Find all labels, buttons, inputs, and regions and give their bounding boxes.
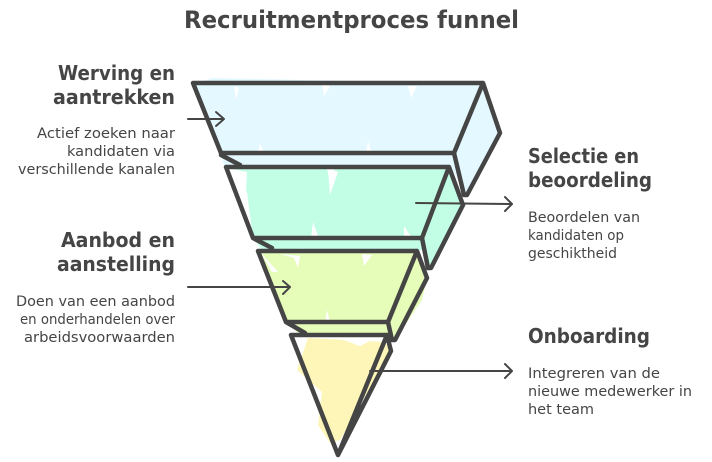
text: Werving en aantrekken description: kandidaten via [67,144,175,160]
funnel [193,78,500,455]
heading: Werving en aantrekken: Werving en [58,61,175,85]
text: Werving en aantrekken description: verschillende kanalen [18,162,175,178]
funnel layer: Selectie en beoordeling [226,167,463,268]
text: Aanbod en aanstelling description [16,294,175,346]
heading: Selectie en beoordeling: Selectie en [528,144,639,168]
arrow: Onboarding [370,364,512,378]
text: Selectie en beoordeling description: kandidaten op [528,228,624,244]
funnel layer: Aanbod en aanstelling [258,251,427,340]
text: Onboarding description [528,366,692,418]
heading: Aanbod en aanstelling [57,228,175,276]
text: Aanbod en aanstelling description: en onderhandelen over [20,312,175,328]
text: Onboarding description: Integreren van de [528,366,660,382]
heading: Aanbod en aanstelling: Aanbod en [61,228,175,252]
text: Onboarding description: het team [528,402,594,418]
text: Selectie en beoordeling description: geschiktheid [528,246,617,262]
arrow: Werving en aantrekken [188,112,224,126]
text: Selectie en beoordeling description [528,210,640,262]
text: Aanbod en aanstelling description: arbeidsvoorwaarden [24,330,175,346]
text: Werving en aantrekken description [18,126,175,178]
text: Aanbod en aanstelling description: Doen van een aanbod [16,294,175,310]
heading: Onboarding: Onboarding [528,324,650,348]
text: Selectie en beoordeling description: Beoordelen van [528,210,640,226]
heading: Werving en aantrekken [53,61,175,109]
funnel layer: Onboarding [291,335,391,455]
heading: Selectie en beoordeling [528,144,652,192]
heading: Aanbod en aanstelling: aanstelling [57,252,175,276]
heading: Selectie en beoordeling: beoordeling [528,168,652,192]
title: Recruitmentproces funnel [184,6,519,34]
funnel layer: Werving en aantrekken [193,78,500,195]
heading: Werving en aantrekken: aantrekken [53,85,175,109]
text: Werving en aantrekken description: Actief zoeken naar [37,126,175,142]
arrow: Aanbod en aanstelling [188,281,290,294]
arrow: Selectie en beoordeling [416,197,512,211]
text: Onboarding description: nieuwe medewerker in [528,384,692,400]
